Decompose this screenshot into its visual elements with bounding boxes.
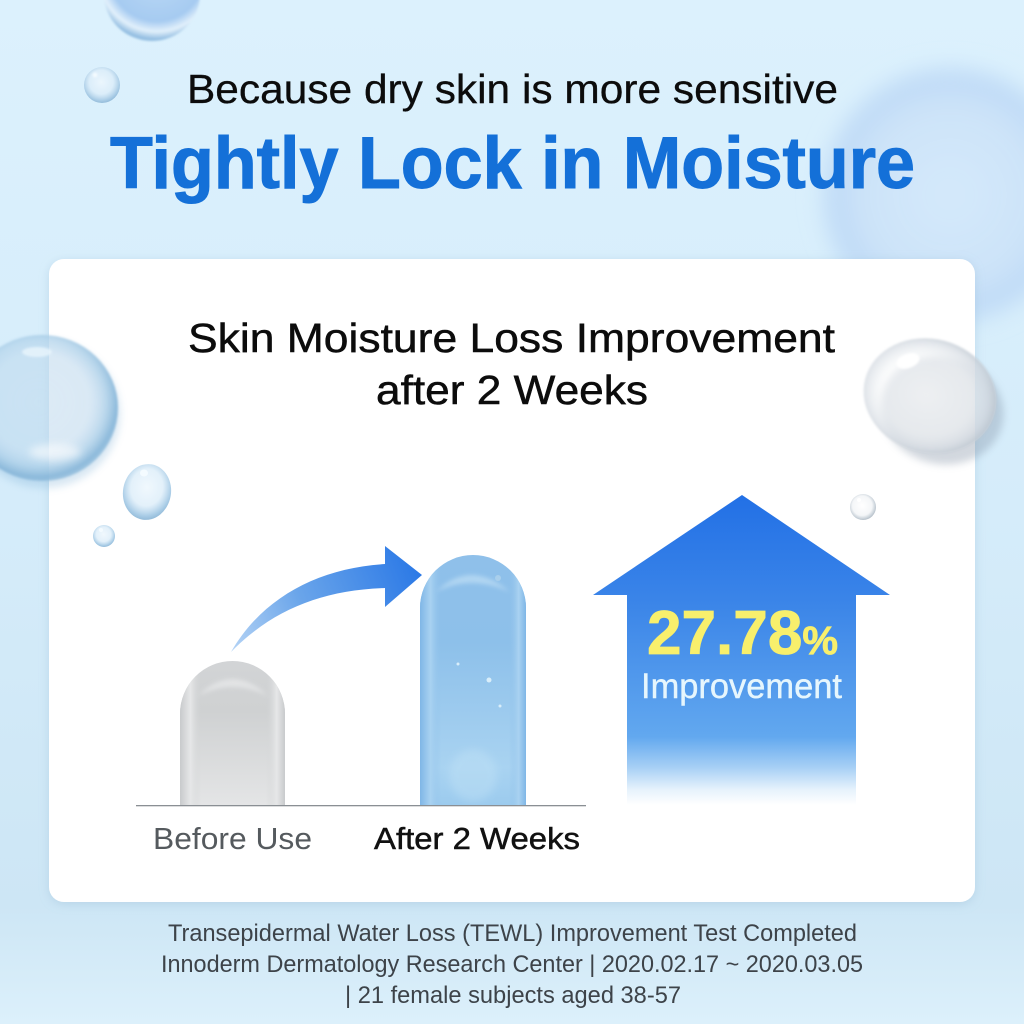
improvement label: Improvement bbox=[641, 667, 842, 706]
blurred background water drop, top right bbox=[815, 60, 1024, 330]
bar: after 2 weeks bbox=[420, 555, 526, 805]
footnote bbox=[161, 920, 863, 1009]
chart baseline bbox=[136, 805, 586, 806]
chart title: Skin Moisture Loss Improvement bbox=[188, 315, 836, 361]
label: after 2 weeks: After 2 Weeks bbox=[374, 821, 580, 856]
chart title bbox=[188, 315, 836, 413]
main heading: Tightly Lock in Moisture bbox=[110, 123, 915, 204]
small water drop beside heading bbox=[84, 67, 120, 103]
label: before use: Before Use bbox=[153, 821, 312, 856]
footnote: | 21 female subjects aged 38-57 bbox=[345, 982, 681, 1009]
bar: before use bbox=[180, 661, 285, 805]
improvement value: 27.78% bbox=[647, 599, 838, 668]
large clear water drop, right bbox=[851, 324, 1016, 478]
chart title: after 2 Weeks bbox=[376, 367, 648, 413]
footnote: Innoderm Dermatology Research Center | 2020.02.17 ~ 2020.03.05 bbox=[161, 951, 863, 978]
tiny clear water drop, right bbox=[850, 494, 876, 520]
house-shaped up arrow callout bbox=[593, 495, 890, 805]
heading line 1: Because dry skin is more sensitive bbox=[187, 66, 838, 112]
panel: white chart card bbox=[49, 259, 975, 902]
large water drop, left bbox=[0, 335, 120, 488]
small water drop, left bbox=[93, 525, 115, 547]
water drop cut off at top edge bbox=[104, 0, 200, 41]
footnote: Transepidermal Water Loss (TEWL) Improvement Test Completed bbox=[168, 920, 857, 947]
curved arrow from before to after bbox=[231, 546, 422, 652]
medium water drop, left bbox=[119, 460, 175, 524]
